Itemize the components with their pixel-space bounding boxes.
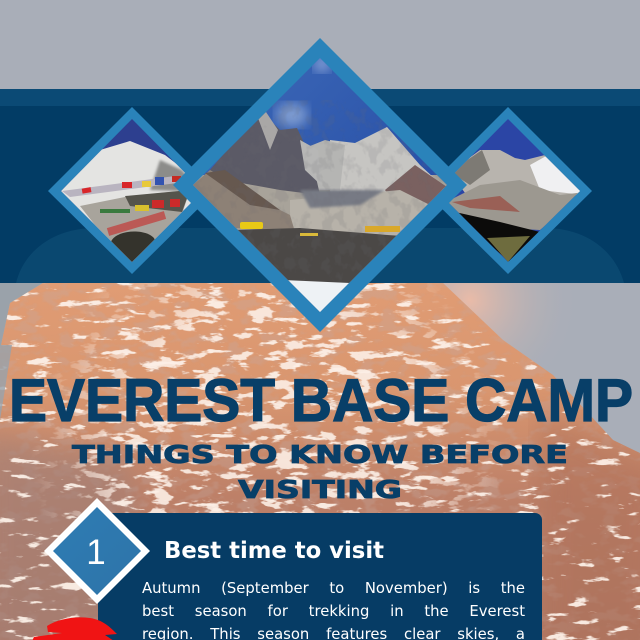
photo diamond: left, prayer flags <box>48 107 198 274</box>
body text: best season for trekking in the Everest <box>142 603 525 620</box>
number badge: 1 <box>86 533 106 572</box>
header band <box>0 89 640 283</box>
subtitle: THINGS TO KNOW BEFORE <box>72 440 568 469</box>
photo diamond: right, boulder <box>442 107 592 274</box>
background photo: mountain at sunset <box>0 283 640 640</box>
number badge <box>44 498 150 604</box>
panel heading: Best time to visit <box>164 538 384 564</box>
photo diamond: center, base camp <box>173 38 467 332</box>
subtitle: VISITING <box>238 475 402 504</box>
panel: best time to visit <box>98 513 542 640</box>
icon: red brush mark <box>30 617 120 640</box>
subtitle <box>72 440 568 504</box>
body text: Autumn (September to November) is the <box>142 580 525 597</box>
